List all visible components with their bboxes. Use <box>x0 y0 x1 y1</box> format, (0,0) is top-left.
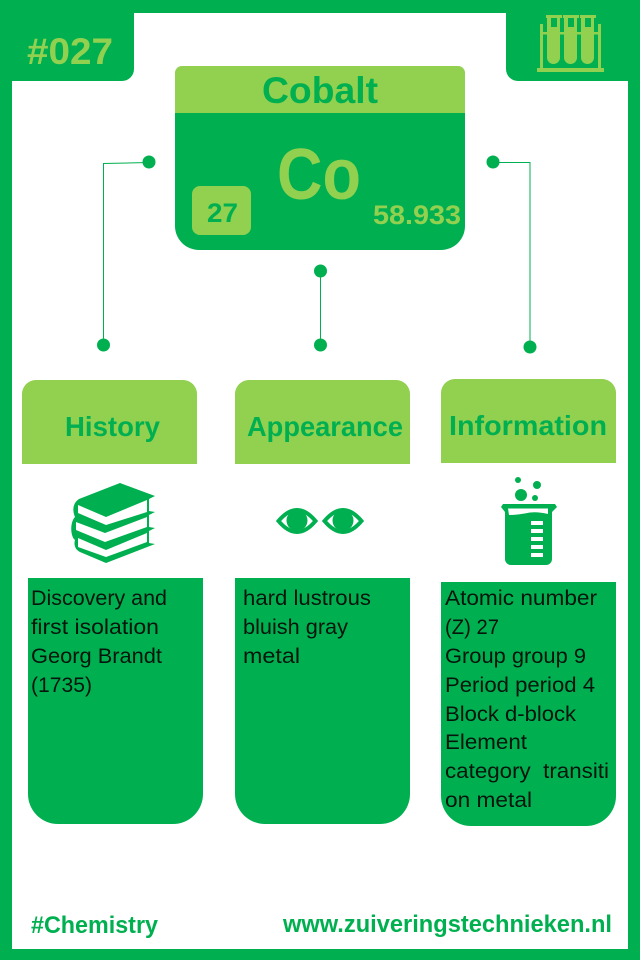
tab: element number <box>0 0 134 81</box>
panel: history <box>22 380 203 824</box>
appearance description: metal <box>243 645 300 668</box>
element card: cobalt <box>175 66 465 250</box>
information description: Element <box>445 731 527 754</box>
appearance description: bluish gray <box>243 616 349 639</box>
information heading: Information <box>449 410 607 441</box>
history description: Discovery and <box>31 587 167 610</box>
tab: test tubes icon <box>506 0 640 81</box>
history description: first isolation <box>31 616 159 639</box>
footer hashtag: #Chemistry <box>31 912 159 939</box>
icon: books <box>71 483 155 563</box>
information description: Atomic number <box>445 587 597 610</box>
element name: Cobalt <box>262 70 378 111</box>
information description: Group group 9 <box>445 645 586 668</box>
information description <box>441 582 616 826</box>
icon: eyes <box>278 510 362 532</box>
connector: appearance <box>314 264 327 352</box>
connector: information <box>486 156 536 354</box>
history description: Georg Brandt <box>31 645 162 668</box>
information description: (Z) 27 <box>445 616 499 639</box>
history description <box>28 578 203 824</box>
information description: on metal <box>445 789 532 812</box>
information description: category transiti <box>445 760 609 783</box>
history heading <box>22 380 197 464</box>
panel: information <box>441 379 616 826</box>
panel: appearance <box>235 380 410 824</box>
icon: beaker <box>501 477 557 565</box>
connector: history <box>97 156 156 352</box>
appearance heading <box>235 380 410 464</box>
tab: element number: #027 <box>27 31 113 72</box>
atomic mass: 58.933 <box>373 200 461 230</box>
information description: Period period 4 <box>445 674 595 697</box>
appearance description: hard lustrous <box>243 587 371 610</box>
appearance description <box>235 578 410 824</box>
element symbol: Co <box>277 135 361 215</box>
footer website: www.zuiveringstechnieken.nl <box>282 911 612 938</box>
atomic number badge <box>192 186 251 235</box>
atomic number badge: 27 <box>207 198 238 228</box>
information description: Block d-block <box>445 703 577 726</box>
history description: (1735) <box>31 674 92 697</box>
appearance heading: Appearance <box>247 411 403 442</box>
history heading: History <box>65 411 160 442</box>
information heading <box>441 379 616 463</box>
